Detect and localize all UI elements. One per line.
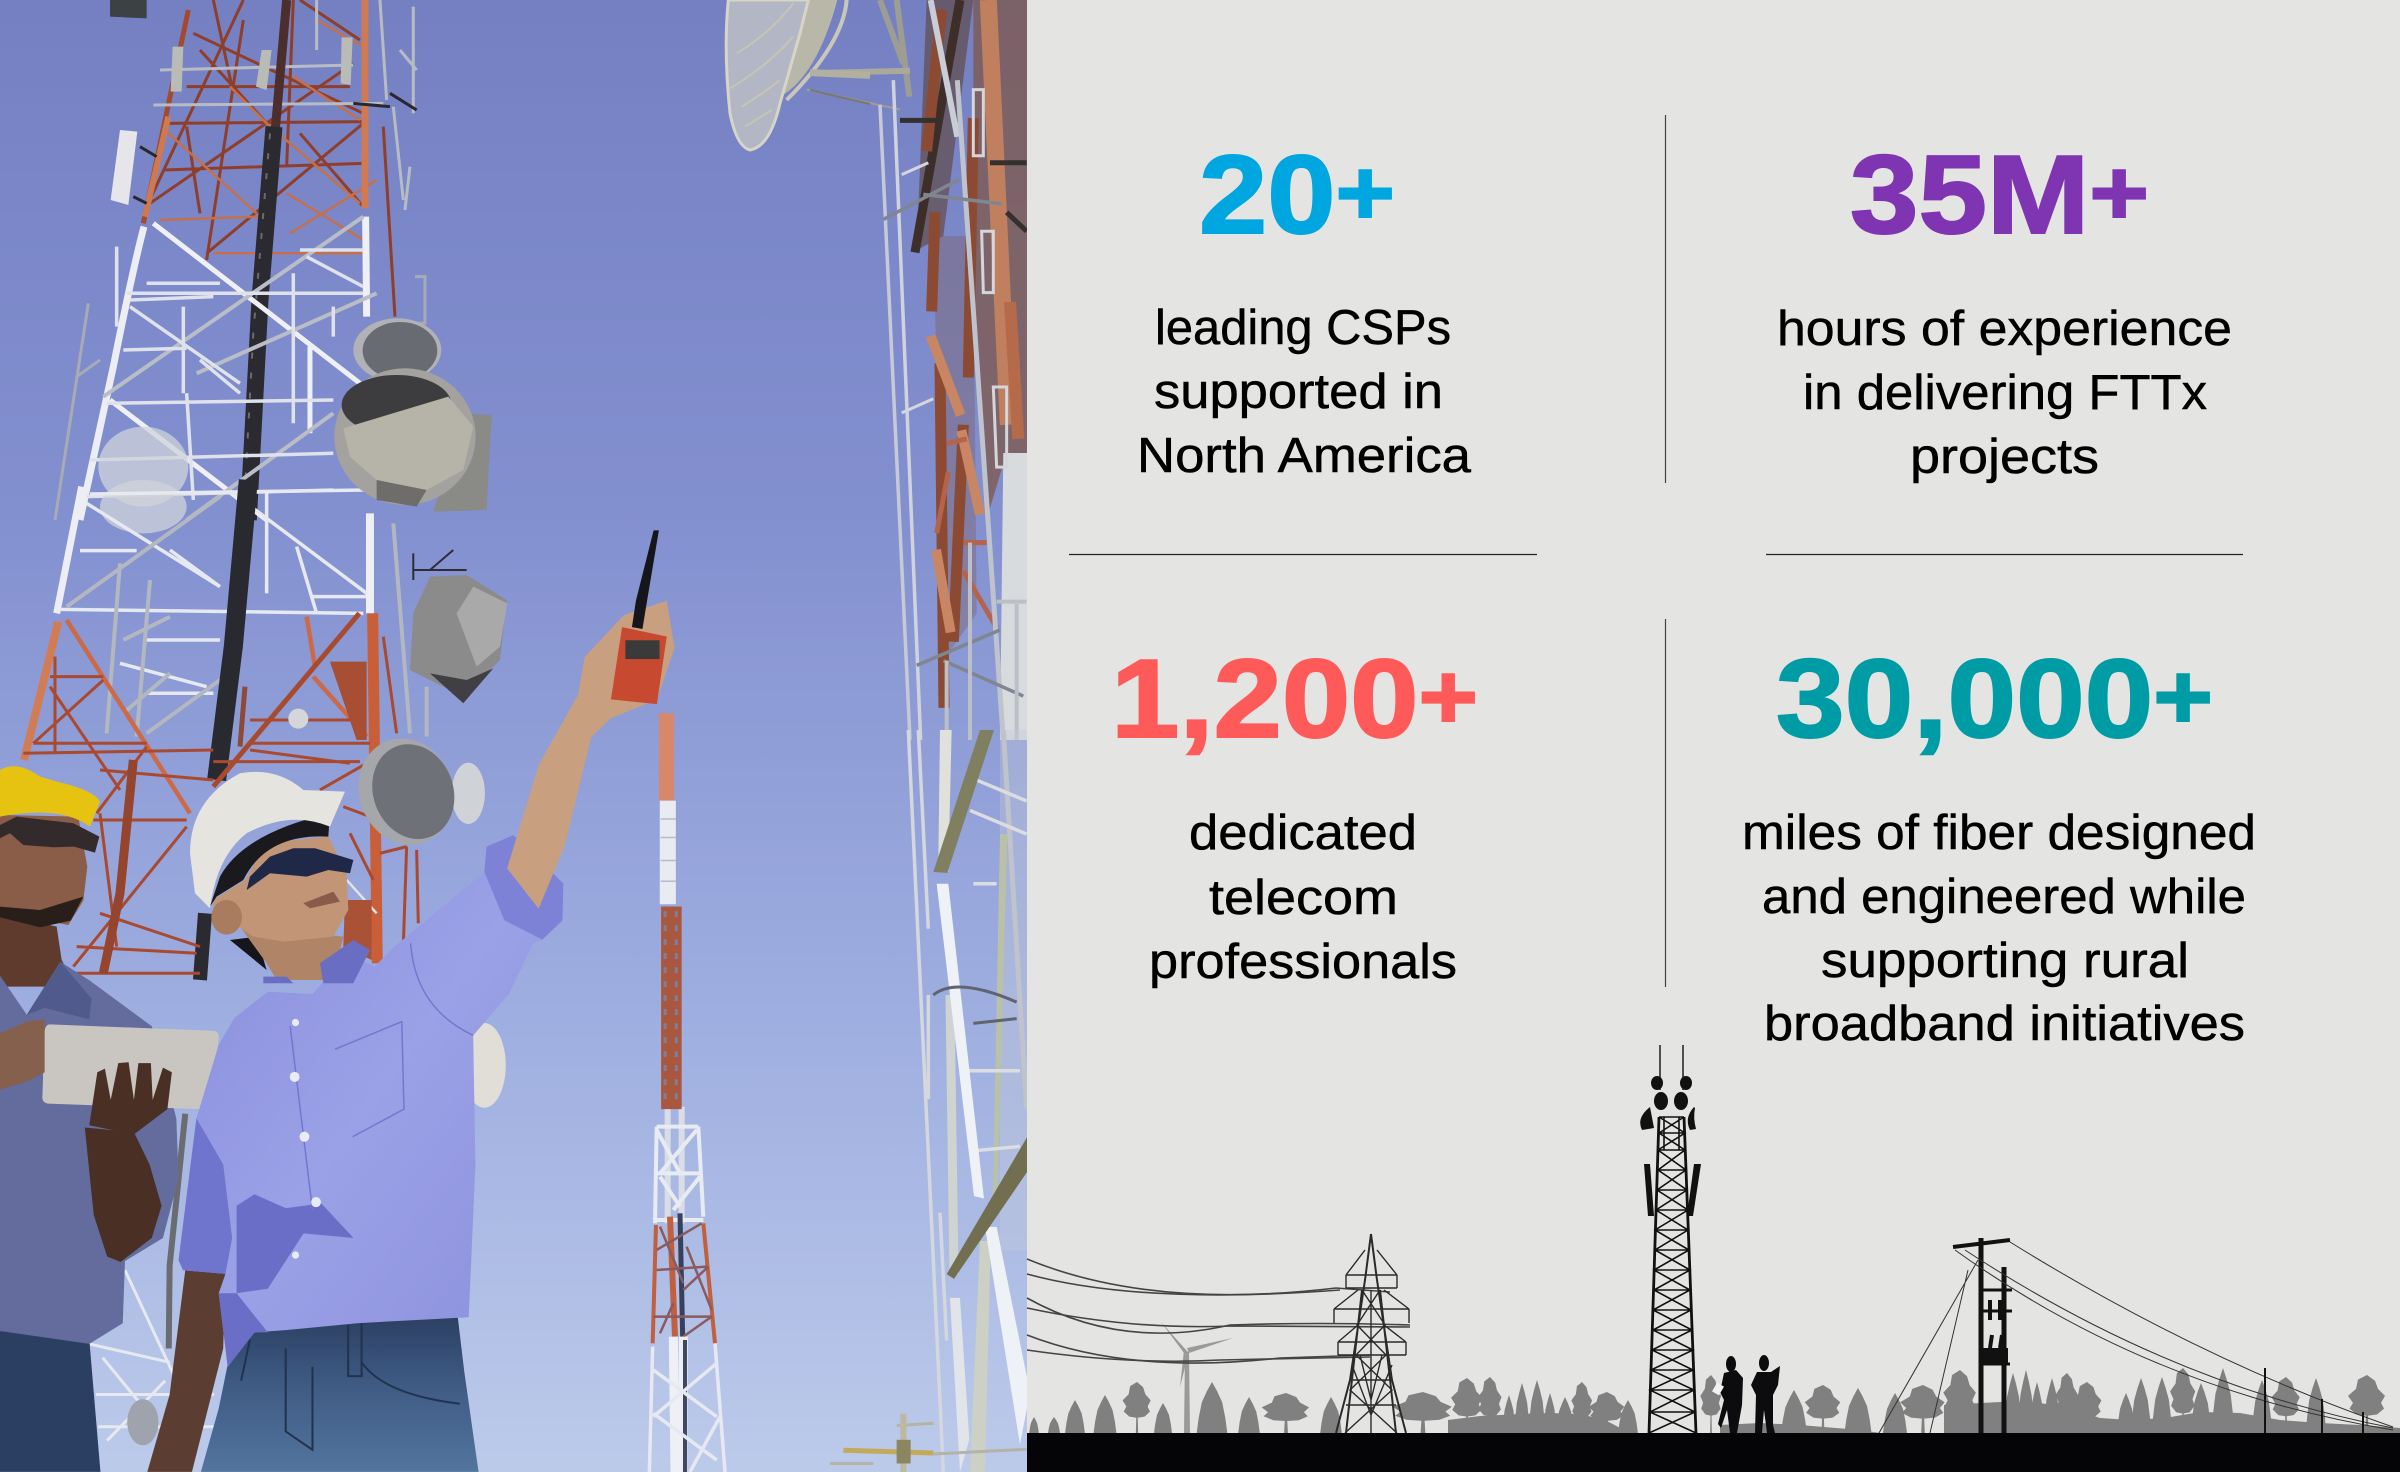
arm xyxy=(507,601,675,909)
black column xyxy=(217,480,248,780)
ground band xyxy=(1027,1433,2400,1472)
shirt xyxy=(0,962,179,1344)
left hand xyxy=(0,1019,45,1090)
left sleeve shadow xyxy=(179,1118,232,1274)
sunglasses xyxy=(247,848,353,890)
left lattice tower lower xyxy=(23,480,467,980)
shirt shadow xyxy=(237,1194,354,1293)
neck xyxy=(240,927,343,980)
mouth xyxy=(303,892,340,908)
description xyxy=(1149,806,1457,989)
description xyxy=(1742,806,2256,1051)
antennas xyxy=(1640,1076,1701,1216)
lower shirt shadow xyxy=(219,1293,268,1367)
hand on tablet xyxy=(89,1062,172,1134)
white helmet xyxy=(190,772,345,908)
right tower lower xyxy=(830,730,1030,1472)
white dish behind shoulder xyxy=(463,1023,506,1108)
lattice behind men xyxy=(89,1270,214,1441)
description: leading CSPs xyxy=(1155,301,1451,355)
right tower upper xyxy=(807,0,1030,740)
collar xyxy=(263,940,370,983)
mesh xyxy=(726,0,808,150)
description: in delivering FTTx xyxy=(1803,366,2207,420)
description: miles of fiber designed xyxy=(1742,806,2256,860)
tablet xyxy=(42,1024,219,1109)
face xyxy=(213,837,348,942)
tower equipment xyxy=(110,0,492,512)
power lines xyxy=(1027,1259,1410,1363)
man in white helmet xyxy=(147,835,563,1472)
shirt creases and pocket xyxy=(290,943,473,1210)
dish 4 small xyxy=(452,763,485,824)
stat: 35M+ xyxy=(1777,133,2232,484)
number: + xyxy=(2089,142,2149,244)
description: dedicated xyxy=(1189,806,1417,860)
rust backdrop xyxy=(973,0,1030,519)
description: projects xyxy=(1910,430,2099,484)
jeans seams xyxy=(241,1323,460,1450)
man in yellow helmet xyxy=(0,766,100,987)
tree line xyxy=(1029,1368,2400,1433)
description: telecom xyxy=(1209,871,1398,925)
forearm xyxy=(85,1128,162,1262)
distant poles xyxy=(2265,1368,2363,1433)
face xyxy=(0,815,87,925)
wind turbine xyxy=(1161,1322,1233,1433)
number: + xyxy=(1419,646,1478,748)
helmet band xyxy=(210,813,330,907)
rim xyxy=(787,0,847,100)
number: + xyxy=(1336,142,1395,244)
description: and engineered while xyxy=(1762,870,2246,924)
far tower xyxy=(649,1107,725,1472)
stat: 30,000+ xyxy=(1742,637,2256,1051)
workers silhouettes xyxy=(1712,1355,1780,1433)
description: hours of experience xyxy=(1777,302,2232,356)
sector panels xyxy=(171,47,183,92)
description: supporting rural xyxy=(1821,934,2189,988)
utility pole xyxy=(1879,1238,2393,1433)
dish horn xyxy=(433,413,492,512)
number: 1,200 xyxy=(1111,637,1389,761)
dish 4 xyxy=(344,725,468,858)
number: 20 xyxy=(1199,133,1322,257)
radio antenna xyxy=(632,530,659,629)
left lattice tower upper xyxy=(55,0,425,520)
stat: 20+ xyxy=(1137,133,1472,483)
dish 1 xyxy=(353,318,441,382)
illustrated skyline xyxy=(1027,1045,2400,1472)
number: 30,000 xyxy=(1776,637,2116,761)
pylon xyxy=(1334,1234,1409,1433)
number: 35M xyxy=(1850,133,2066,257)
orange stair xyxy=(330,662,367,740)
white dome xyxy=(98,427,188,507)
beard xyxy=(0,897,83,927)
neck xyxy=(0,913,77,987)
radio xyxy=(611,627,667,704)
yellow helmet xyxy=(0,766,100,827)
dish back xyxy=(780,0,837,97)
description xyxy=(1137,301,1472,483)
buttons xyxy=(290,1019,321,1259)
small dish xyxy=(288,709,308,729)
collar xyxy=(27,962,92,1019)
description xyxy=(1777,302,2232,484)
description: professionals xyxy=(1149,935,1457,989)
description: supported in xyxy=(1154,365,1443,419)
red lattice xyxy=(24,622,58,760)
far tower upper mast xyxy=(659,713,682,1109)
jeans xyxy=(201,1315,479,1472)
description: North America xyxy=(1137,429,1472,483)
top right mesh dish xyxy=(726,0,870,150)
number: + xyxy=(2153,646,2213,748)
hair back xyxy=(230,937,267,970)
covered large dish xyxy=(334,368,476,505)
dish 3 xyxy=(410,575,507,697)
lower arm xyxy=(147,1270,225,1472)
stat: 1,200+ xyxy=(1111,637,1478,989)
top box xyxy=(110,0,147,18)
white lattice xyxy=(80,227,144,520)
sky xyxy=(0,0,1027,1472)
mount arms xyxy=(810,73,870,75)
black column xyxy=(275,0,287,133)
sunglasses xyxy=(0,817,99,853)
jeans xyxy=(0,1331,100,1472)
shirt xyxy=(179,835,563,1367)
main cell tower xyxy=(1640,1045,1701,1433)
cuff shadow xyxy=(484,835,563,940)
photo: engineers and telecom towers xyxy=(0,0,1030,1472)
raised arm with radio xyxy=(507,530,675,909)
description: broadband initiatives xyxy=(1764,997,2245,1051)
ear xyxy=(211,900,242,935)
